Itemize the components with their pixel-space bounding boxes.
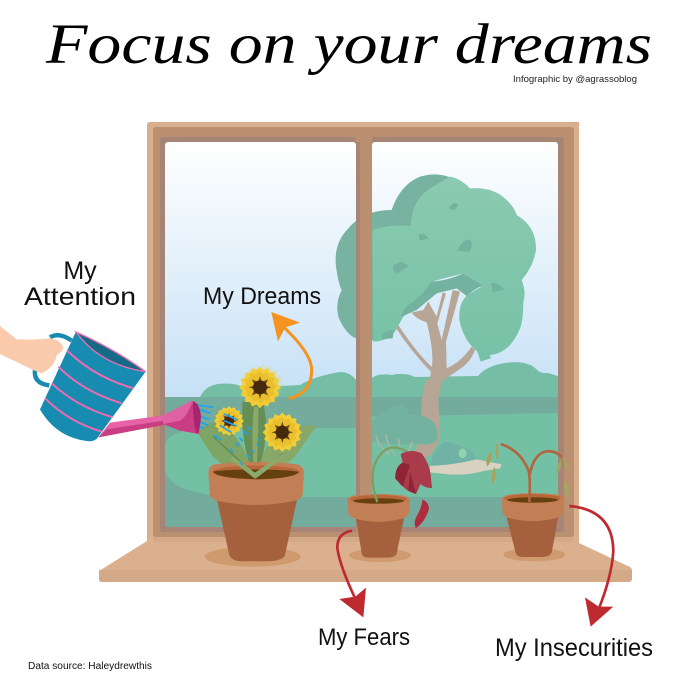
sunflowers xyxy=(214,364,302,452)
tree front canopy xyxy=(372,177,536,362)
spout xyxy=(98,401,201,437)
light spot xyxy=(459,448,467,458)
pot xyxy=(347,494,410,558)
pot xyxy=(208,453,304,561)
pot xyxy=(502,493,564,557)
tree back canopy xyxy=(336,174,453,341)
window frame xyxy=(147,122,579,545)
window xyxy=(147,122,579,545)
pot shadow xyxy=(349,549,411,562)
distant blob xyxy=(430,442,477,467)
wilted plant: fears xyxy=(347,447,432,562)
label: My Dreams: My Dreams xyxy=(203,283,321,310)
window sill xyxy=(99,537,632,582)
title: Focus on your dreams xyxy=(45,13,652,76)
sky panes xyxy=(160,137,564,532)
distant hills xyxy=(200,362,558,397)
foreground meadow xyxy=(165,413,558,497)
water drops xyxy=(193,405,261,465)
trunk base xyxy=(413,380,440,458)
tree trunk xyxy=(396,290,475,397)
lower landscape details xyxy=(372,380,502,475)
pot shadow xyxy=(503,548,565,561)
label: My Insecurities: My Insecurities xyxy=(495,634,653,662)
centre mullion xyxy=(356,127,372,537)
fallen branch xyxy=(430,459,502,475)
watering can with hand xyxy=(0,326,201,441)
outdoor landscape xyxy=(165,174,558,527)
dry leaves xyxy=(486,443,571,498)
label: My Attention: My xyxy=(63,257,97,285)
wilted flower xyxy=(395,451,432,494)
arrow: dreams xyxy=(271,312,312,399)
pot shadow xyxy=(205,547,301,567)
arrow: insecurities xyxy=(569,506,613,627)
label: My Attention xyxy=(24,257,136,311)
large sunflower plant with pot xyxy=(193,364,317,567)
label: My Fears: My Fears xyxy=(318,624,410,651)
bare twigs xyxy=(376,435,413,455)
credit line: Infographic by @agrassoblog xyxy=(513,74,637,85)
darker meadow band xyxy=(165,397,558,527)
handle xyxy=(35,335,72,385)
data source: Data source: Haleydrewthis xyxy=(28,661,152,672)
label: My Attention: Attention xyxy=(24,283,136,311)
foreground bush xyxy=(372,416,438,444)
drooping stem xyxy=(373,447,407,502)
leaves xyxy=(197,402,317,478)
wilted plant: insecurities xyxy=(486,443,571,561)
bare stems xyxy=(501,444,562,502)
falling petal xyxy=(415,499,429,528)
can body xyxy=(40,332,146,441)
arrow: fears xyxy=(337,531,366,617)
hand xyxy=(0,326,66,377)
